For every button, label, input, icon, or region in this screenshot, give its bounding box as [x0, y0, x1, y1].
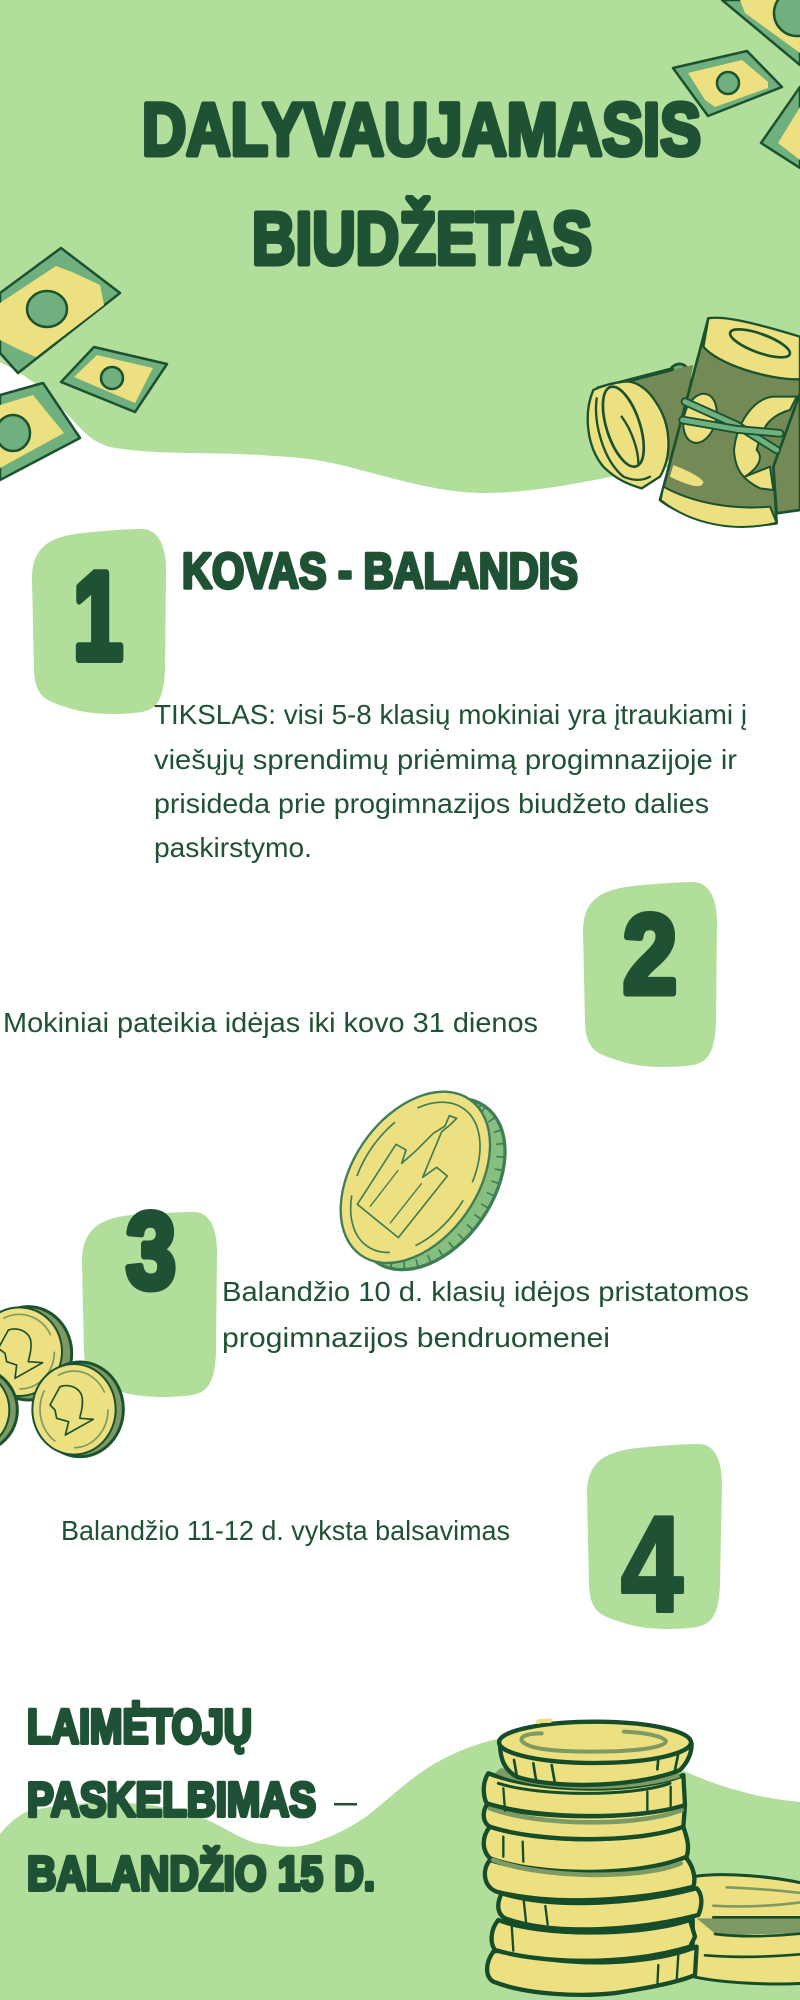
icon: rolled banknotes: [588, 318, 800, 527]
step 3 number card: 3: [126, 1190, 176, 1311]
goal text block: prisideda prie progimnazijos biudžeto dalies: [154, 788, 709, 819]
icon: banknote top right corner: [722, 0, 800, 65]
icon: banknote top centre right: [673, 51, 782, 116]
icon: coin stacks: [484, 1721, 800, 1995]
step 2 text: Mokiniai pateikia idėjas iki kovo 31 dienos: [3, 1007, 538, 1038]
icon: banknote large left: [0, 248, 120, 373]
title: DALYVAUJAMASIS: [142, 88, 701, 171]
icon: banknote right edge: [761, 87, 800, 168]
step 4 number card: 4: [621, 1488, 683, 1640]
heading: kovas - balandis: KOVAS - BALANDIS: [182, 543, 578, 599]
heading: winners announcement: BALANDŽIO 15 D.: [27, 1846, 375, 1901]
heading: winners announcement: PASKELBIMAS: [27, 1774, 316, 1827]
goal text block: TIKSLAS: visi 5-8 klasių mokiniai yra įtraukiami į: [154, 699, 747, 730]
step 3 text: Balandžio 10 d. klasių idėjos pristatomos: [222, 1276, 749, 1307]
goal text block: [154, 699, 747, 863]
icon: banknote small left: [61, 347, 167, 412]
step 4 text: Balandžio 11-12 d. vyksta balsavimas: [61, 1515, 510, 1546]
step 4 number card: [587, 1444, 722, 1640]
step 3 text: [222, 1276, 749, 1353]
icon: large tilted coin: [310, 1064, 536, 1298]
step 2 number card: 2: [623, 892, 677, 1017]
goal text block: paskirstymo.: [154, 832, 312, 863]
step 3 text: progimnazijos bendruomenei: [222, 1322, 610, 1353]
header green wave background: [0, 0, 800, 493]
step 3 number card: [82, 1190, 217, 1397]
step 2 number card: [583, 882, 717, 1067]
heading: winners announcement: [27, 1701, 375, 1901]
icon: banknote lower left: [0, 383, 80, 480]
goal text block: viešųjų sprendimų priėmimą progimnazijoje ir: [154, 744, 737, 775]
step 1 number card: [32, 529, 166, 714]
footer green wave background: [0, 1739, 800, 2000]
title: BIUDŽETAS: [252, 197, 592, 280]
icon: coins with portrait: [0, 1307, 123, 1457]
step 1 number card: 1: [73, 548, 123, 686]
heading: winners announcement: LAIMĖTOJŲ: [27, 1701, 252, 1754]
title: [142, 88, 701, 280]
